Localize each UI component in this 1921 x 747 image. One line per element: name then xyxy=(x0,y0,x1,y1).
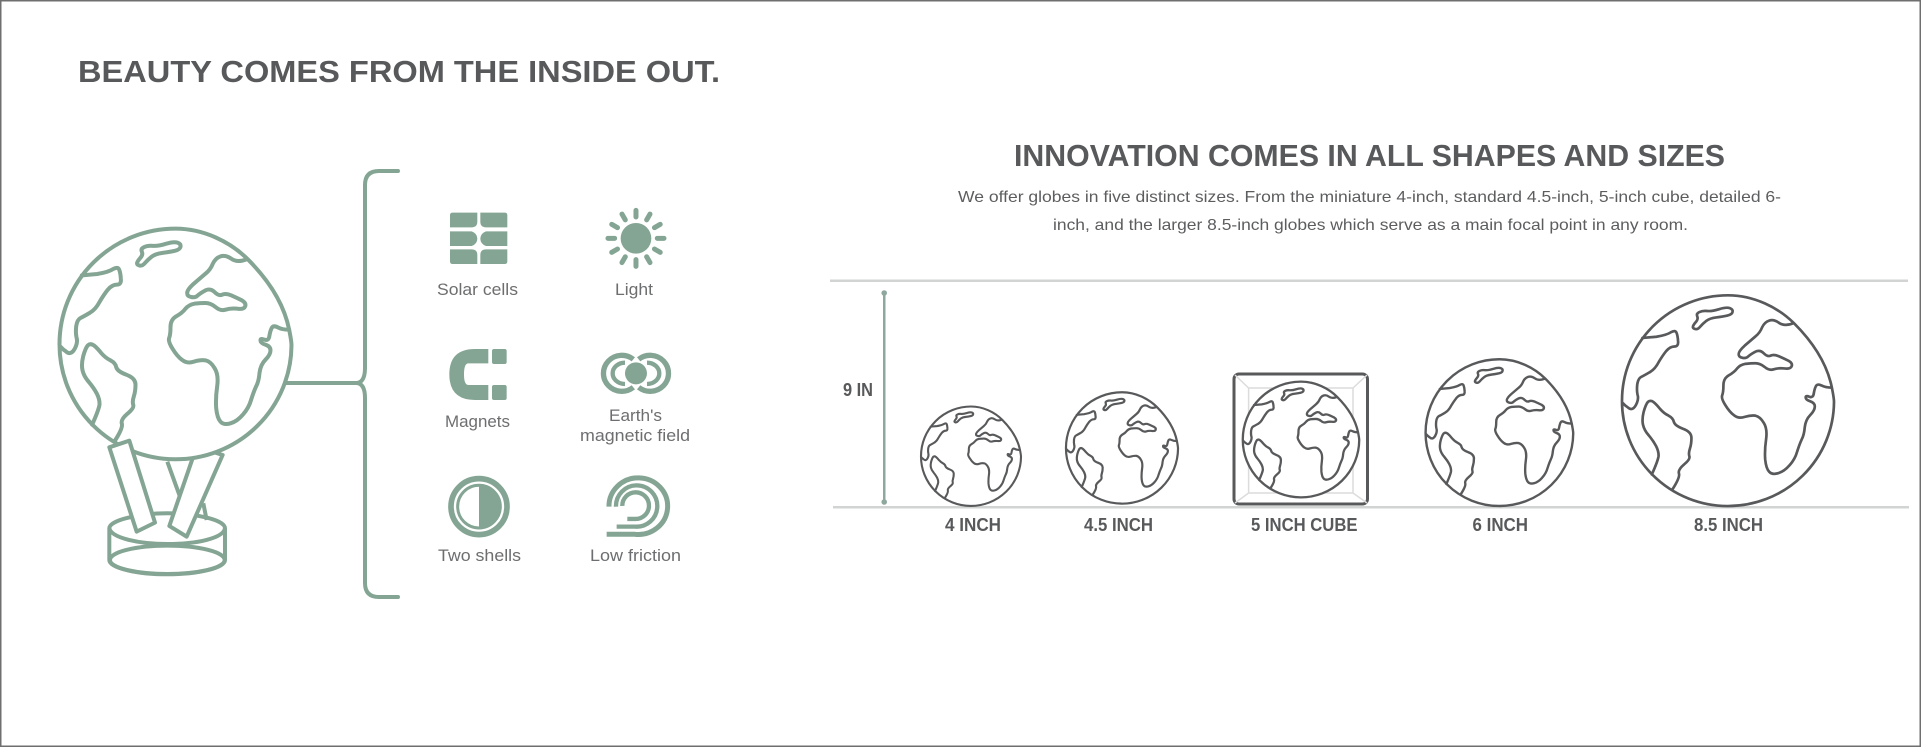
feature: two shells xyxy=(438,479,521,565)
label: two shells: Two shells xyxy=(438,547,521,565)
label: light: Light xyxy=(615,281,653,299)
description paragraph xyxy=(958,189,1781,234)
feature: solar cells xyxy=(437,213,518,299)
globe size: 6 inch: 6 INCH xyxy=(1472,515,1528,535)
globe size: 5 inch cube: 5 INCH CUBE xyxy=(1251,515,1358,535)
icon: two shells xyxy=(451,479,507,535)
icon: solar cells xyxy=(450,213,507,264)
globe size: 4.5 inch xyxy=(1066,392,1178,535)
globe size: 8.5 inch xyxy=(1622,295,1834,535)
feature: earth's magnetic field xyxy=(580,355,690,445)
icon: magnet xyxy=(449,349,507,400)
feature: low friction xyxy=(590,478,681,565)
icon: low friction xyxy=(607,478,668,534)
globe size: 4 inch: 4 INCH xyxy=(945,515,1001,535)
globe size: 8.5 inch: 8.5 INCH xyxy=(1694,515,1763,535)
label: earth's magnetic field xyxy=(580,407,690,445)
globe size: 5 inch cube xyxy=(1234,374,1368,535)
globe size: 4 inch xyxy=(921,407,1021,535)
height scale: 9 inches xyxy=(843,290,887,505)
bracket connecting globe to features xyxy=(285,171,398,597)
stand front leg xyxy=(109,441,155,532)
globe size: 6 inch xyxy=(1426,359,1573,535)
icon: sun xyxy=(608,210,664,266)
description paragraph: inch, and the larger 8.5-inch globes which serve as a main focal point in any room. xyxy=(1053,217,1688,234)
illustration: globe on magnetic stand xyxy=(60,229,291,574)
heading: innovation comes in all shapes and sizes: INNOVATION COMES IN ALL SHAPES AND SIZES xyxy=(1014,138,1725,173)
stand base xyxy=(109,447,225,574)
height scale: 9 inches: 9 IN xyxy=(843,380,873,400)
label: magnets: Magnets xyxy=(445,413,510,431)
label: low friction: Low friction xyxy=(590,547,681,565)
main globe xyxy=(60,229,291,459)
globe size: 4.5 inch: 4.5 INCH xyxy=(1084,515,1153,535)
icon: magnetic field xyxy=(603,355,668,391)
label: earth's magnetic field: magnetic field xyxy=(580,427,690,445)
label: solar cells: Solar cells xyxy=(437,281,518,299)
label: earth's magnetic field: Earth's xyxy=(609,407,662,425)
feature: light xyxy=(608,210,664,299)
description paragraph: We offer globes in five distinct sizes. From the miniature 4-inch, standard 4.5-inch, 5-inch cube, detailed 6- xyxy=(958,189,1781,206)
feature: magnets xyxy=(445,349,510,431)
heading: beauty comes from the inside out: BEAUTY COMES FROM THE INSIDE OUT. xyxy=(78,54,720,89)
